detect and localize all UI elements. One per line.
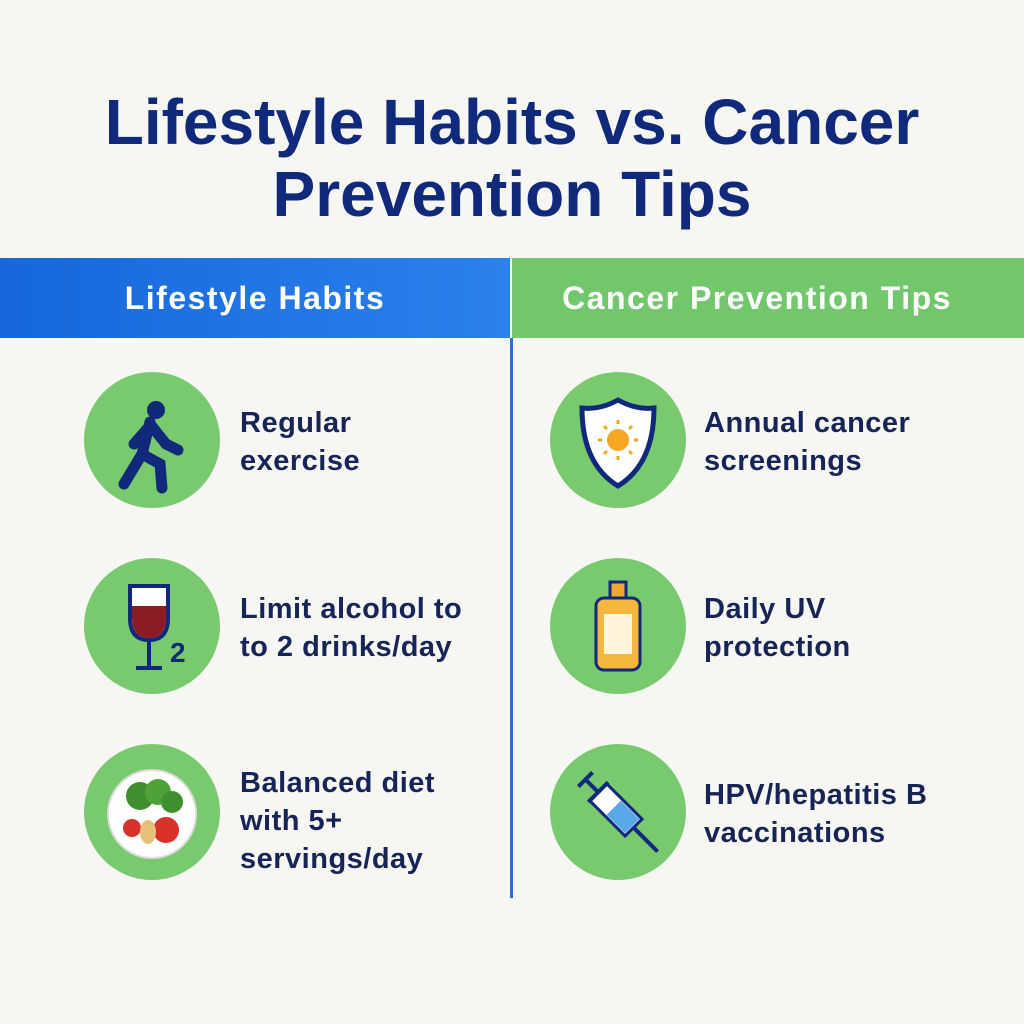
icon: shield with sun xyxy=(550,372,686,508)
text: vaccinations xyxy=(704,779,927,849)
text: vaccinations: vaccinations xyxy=(704,817,886,849)
text: daily uv protection: Daily UV xyxy=(704,593,826,625)
text: limit alcohol xyxy=(240,593,462,663)
text: balanced diet: Balanced diet xyxy=(240,767,435,799)
text: regular exercise: Regular xyxy=(240,407,351,439)
header: cancer prevention tips xyxy=(512,258,1024,338)
text: balanced diet: with 5+ xyxy=(240,805,343,837)
icon: plate of vegetables xyxy=(84,744,220,880)
header: lifestyle habits xyxy=(0,258,510,338)
title xyxy=(105,86,919,230)
icon: wine glass xyxy=(84,558,220,694)
header: cancer prevention tips: Cancer Prevention Tips xyxy=(562,280,952,316)
text: daily uv protection: protection xyxy=(704,631,851,663)
title: Lifestyle Habits vs. Cancer xyxy=(105,86,919,158)
icon: walking person xyxy=(84,372,220,508)
text: daily uv protection xyxy=(704,593,851,663)
text: annual cancer screenings: screenings xyxy=(704,445,862,477)
icon: syringe xyxy=(550,744,686,880)
icon: wine glass: 2 xyxy=(170,637,186,668)
text: vaccinations: HPV/hepatitis B xyxy=(704,779,927,811)
header: lifestyle habits: Lifestyle Habits xyxy=(125,280,385,316)
text: limit alcohol: to 2 drinks/day xyxy=(240,631,452,663)
text: limit alcohol: Limit alcohol to xyxy=(240,593,462,625)
text: balanced diet xyxy=(240,767,435,875)
divider xyxy=(510,338,513,898)
text: regular exercise xyxy=(240,407,360,477)
text: balanced diet: servings/day xyxy=(240,843,423,875)
text: annual cancer screenings xyxy=(704,407,910,477)
icon: sunscreen bottle xyxy=(550,558,686,694)
text: annual cancer screenings: Annual cancer xyxy=(704,407,910,439)
text: regular exercise: exercise xyxy=(240,445,360,477)
title: Prevention Tips xyxy=(273,158,751,230)
